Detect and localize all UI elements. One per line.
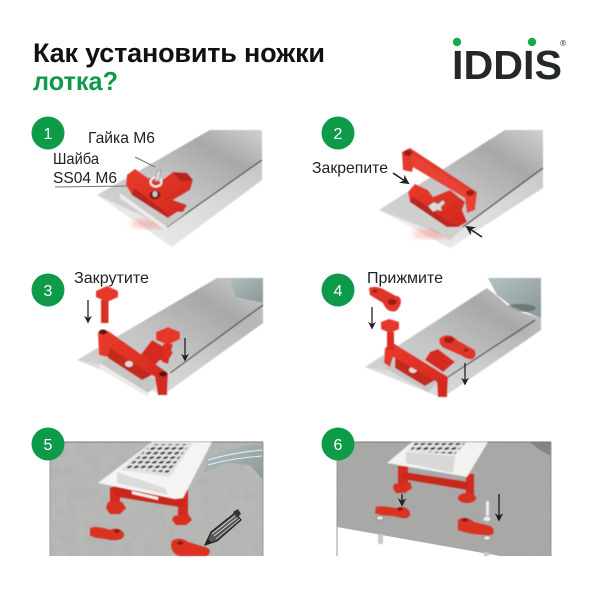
panel: step 1 — [32, 116, 262, 247]
panel: step 3 — [32, 270, 263, 397]
title — [33, 38, 325, 96]
step 4 plate illustration — [365, 278, 541, 398]
arrow: link left — [371, 307, 373, 328]
badge 4 — [322, 274, 354, 306]
badge 6: 6 — [334, 437, 343, 454]
label: washer — [53, 151, 117, 187]
badge 2 — [322, 116, 354, 150]
label: washer: SS04 М6 — [53, 170, 117, 187]
badge 1 — [32, 116, 64, 150]
step 6 slab scene — [337, 442, 551, 556]
step 5 floor scene — [50, 442, 263, 556]
arrow: to bracket — [393, 173, 408, 183]
badge 3: 3 — [44, 283, 53, 300]
badge 5 — [32, 428, 64, 460]
panel: step 2 — [312, 116, 543, 248]
panel: step 4 — [322, 270, 541, 398]
title: лотка? — [33, 66, 118, 96]
label: nut M6: Гайка М6 — [88, 130, 155, 147]
badge 3 — [32, 274, 64, 306]
step 1 plate illustration — [97, 130, 262, 247]
logo: IDDIS: ® — [560, 38, 567, 48]
badge 6 — [322, 428, 354, 460]
logo: IDDIS: IDDIS — [452, 42, 562, 88]
arrow: to plate edge — [467, 227, 482, 237]
step 2 plate illustration — [379, 130, 543, 248]
step 3 plate illustration — [77, 278, 263, 397]
panel: step 5 — [32, 428, 263, 556]
arrow: screw right — [184, 338, 186, 360]
arrow: to right fixing — [498, 494, 500, 520]
badge 5: 5 — [44, 437, 53, 454]
leader lines — [55, 157, 155, 187]
badge 2: 2 — [334, 126, 343, 143]
badge 1: 1 — [44, 126, 53, 143]
title: Как установить ножки — [33, 38, 325, 68]
panel: step 6 — [322, 428, 551, 556]
badge 4: 4 — [334, 283, 343, 300]
arrow: to left link — [401, 494, 403, 505]
arrow: screw left — [87, 300, 89, 322]
label: screw in: Закрутите — [74, 270, 149, 287]
label: press: Прижмите — [367, 270, 443, 287]
label: fasten: Закрепите — [312, 160, 388, 177]
label: washer: Шайба — [53, 151, 99, 168]
arrow: link right — [464, 363, 466, 384]
icon: pencil — [205, 509, 241, 545]
